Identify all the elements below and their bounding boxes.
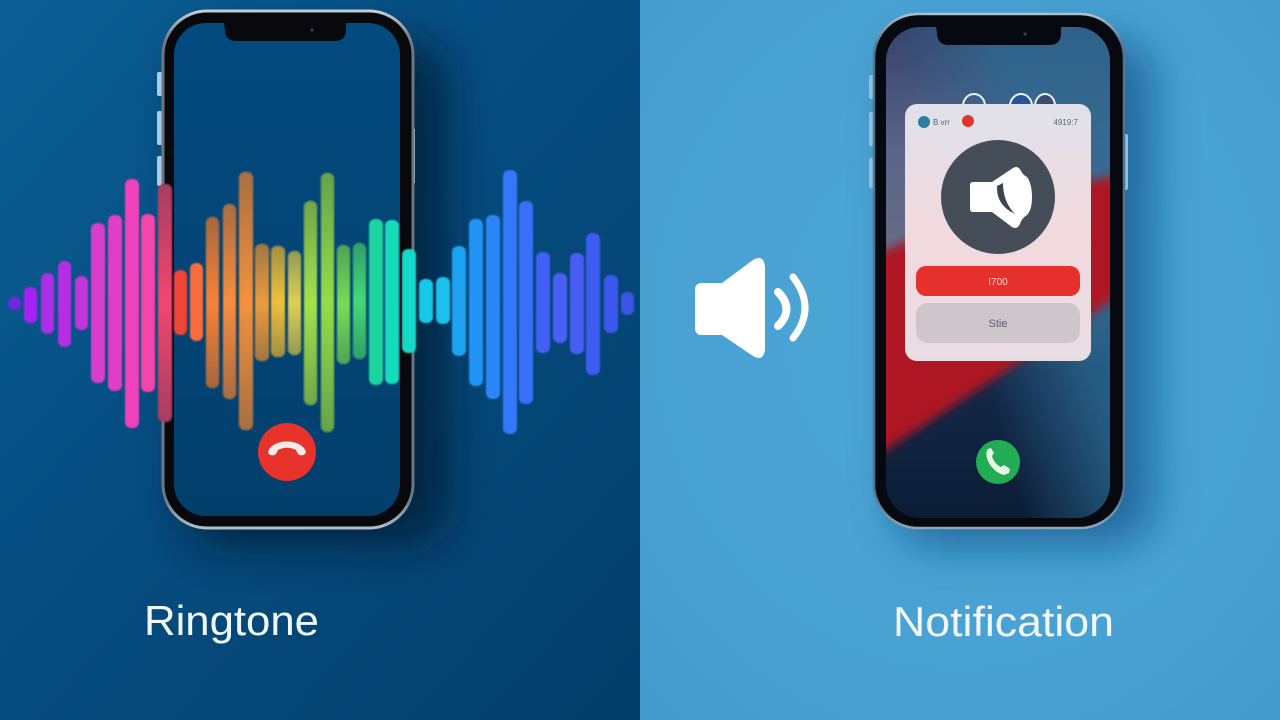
phone: notification xyxy=(850,14,1130,528)
icon: muted speaker xyxy=(970,167,1032,228)
phone body xyxy=(163,11,413,528)
icon: answer call button xyxy=(976,440,1020,484)
red button xyxy=(916,266,1080,296)
sound circle xyxy=(941,140,1055,254)
panel: notification background xyxy=(640,0,1280,720)
side buttons xyxy=(157,72,415,186)
phone body xyxy=(874,14,1124,528)
card header: time: 4919:7 xyxy=(1054,118,1079,127)
screen xyxy=(174,23,400,516)
sound wave chart xyxy=(8,170,634,434)
ringtone phone shadow xyxy=(185,40,447,545)
notification phone shadow xyxy=(895,40,1153,545)
panel: ringtone background xyxy=(0,0,640,720)
phone: ringtone xyxy=(157,11,415,528)
screen wallpaper xyxy=(886,27,1110,518)
card header: red dot xyxy=(962,115,974,127)
speaker dot xyxy=(310,28,314,32)
label: Ringtone: Ringtone xyxy=(144,597,319,644)
notification rings behind card xyxy=(963,94,1055,118)
sound wave shading xyxy=(158,172,366,432)
notch xyxy=(936,26,1061,45)
icon: hang up call button xyxy=(258,423,316,481)
red button: I700 xyxy=(988,277,1008,288)
notch xyxy=(224,22,346,41)
card header: app name: B vrr xyxy=(933,118,950,127)
grey button xyxy=(916,303,1080,343)
side buttons xyxy=(869,75,1128,190)
notification card xyxy=(905,104,1091,361)
icon: speaker with sound waves xyxy=(695,258,805,358)
card header: app icon xyxy=(918,116,930,128)
label: Notification: Notification xyxy=(893,598,1114,645)
grey button: Stie xyxy=(989,318,1007,330)
